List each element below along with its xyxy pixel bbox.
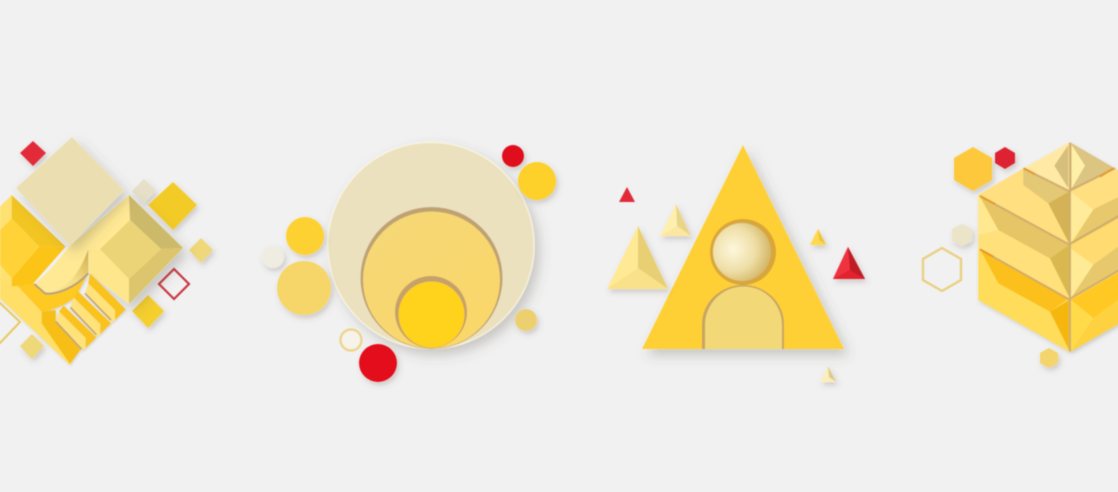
finger 3 — [56, 311, 86, 351]
leaf tier: middle right — [1071, 195, 1118, 298]
circle: yellow left — [286, 217, 324, 255]
diamond: outline left — [0, 303, 20, 343]
hand: pale arm strip — [37, 195, 129, 285]
finger 1 — [85, 283, 115, 323]
icon: person triangle — [607, 145, 865, 382]
leaf tier: middle left — [978, 195, 1069, 298]
icon: concentric circles — [262, 142, 556, 382]
circle: pale left — [277, 261, 331, 315]
finger 4 — [42, 310, 82, 364]
hexagon: yellow — [954, 147, 992, 191]
diamond: yellow lower — [132, 295, 164, 328]
pyramid: cream bottom — [820, 366, 836, 382]
diamond: pale lower — [20, 334, 44, 359]
leaf tier: bottom right — [1071, 248, 1118, 352]
diamond: red outline — [159, 269, 189, 299]
pyramid: left yellow — [0, 195, 66, 287]
leaf tier: top left — [978, 168, 1069, 243]
circle: inner hole — [395, 276, 467, 348]
circle: red top — [502, 145, 524, 167]
pyramid: right pale — [89, 195, 183, 304]
diamond: pale right — [189, 238, 213, 263]
hexagon: cream — [952, 224, 972, 246]
circle: middle yellow — [363, 212, 500, 348]
diamond: red — [20, 141, 46, 166]
icon: handshake diamond — [0, 137, 213, 365]
circle: small pale — [515, 309, 537, 331]
leaf: main hexagon body — [978, 143, 1118, 352]
hexagon: small bottom — [1040, 348, 1058, 368]
icon: hexagon leaf — [923, 143, 1118, 368]
leaf tier: top right — [1071, 168, 1118, 245]
head recess — [710, 219, 776, 285]
circle: white left — [262, 246, 284, 268]
circle: red bottom — [359, 344, 397, 382]
triangle: main yellow — [642, 145, 844, 349]
pyramid: pale small — [660, 204, 691, 236]
hand: thumb — [34, 249, 88, 294]
hand: lower yellow hand with fingers — [0, 270, 126, 365]
finger 2 — [70, 297, 100, 337]
body recess — [702, 285, 784, 349]
leaf tier: bottom left — [978, 248, 1069, 352]
circle: ring — [340, 330, 362, 350]
diamond: small grey — [132, 179, 156, 203]
circle: middle hole — [360, 207, 502, 349]
head ball — [713, 223, 771, 281]
triangle: red small — [619, 187, 635, 202]
circle: yellow top right — [518, 162, 556, 200]
body — [705, 286, 782, 349]
diamond: yellow — [148, 182, 197, 230]
pyramid: large pale — [607, 226, 668, 289]
diamond: large beige — [16, 137, 124, 246]
pyramid: small yellow — [810, 229, 826, 245]
circle: large beige — [328, 142, 534, 348]
leaf top diamond — [1023, 143, 1115, 191]
hexagon: red — [995, 147, 1015, 169]
circle: inner yellow — [398, 282, 464, 348]
hexagon: outline — [923, 248, 961, 291]
pyramid: red right — [833, 247, 865, 279]
